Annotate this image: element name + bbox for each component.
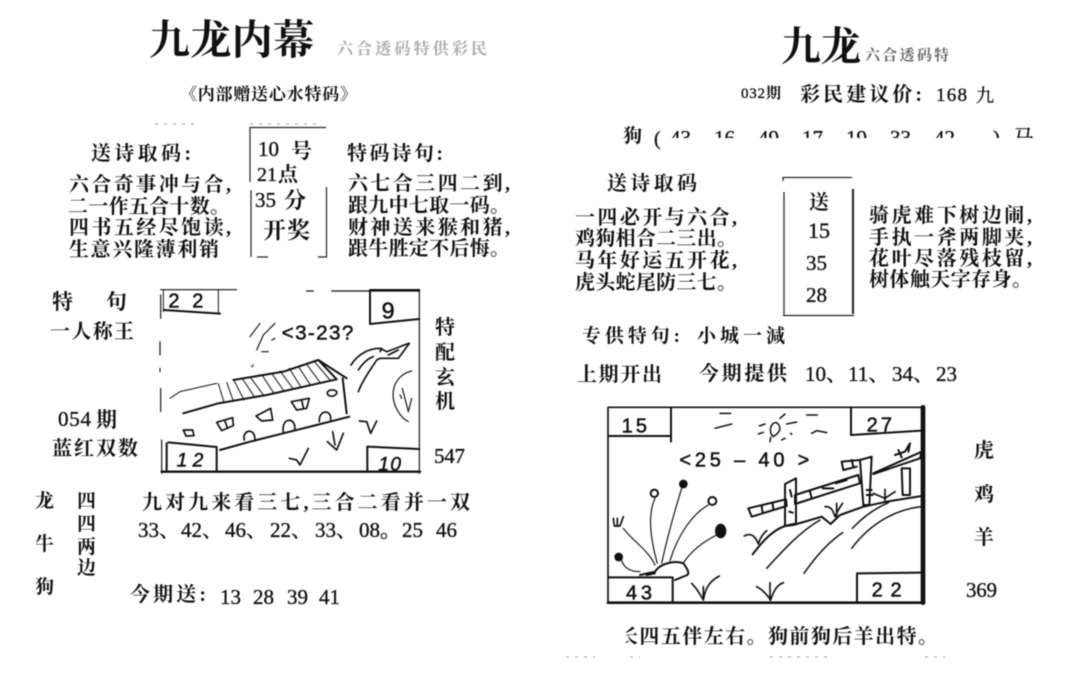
label: special phrase: 句: [106, 290, 127, 314]
drawing: right scene sketch: [608, 407, 924, 604]
text block: left poem: [68, 173, 231, 261]
box: 9: [370, 290, 419, 324]
icon: sun and clouds: [715, 413, 827, 442]
heading: internal special code: 《内部赠送心水特码》: [180, 84, 357, 104]
text: animal hints: 鸡: [974, 483, 994, 506]
box: 43: [609, 577, 673, 604]
row: clipped numbers: 43: [670, 126, 691, 150]
box: 10: 10: [378, 455, 401, 476]
row: clipped numbers: 16: [714, 126, 735, 150]
text: small city: 小城一減: [697, 325, 785, 347]
row: clipped numbers: 17: [802, 126, 823, 150]
box: 27: 27: [867, 415, 892, 437]
text: issue 032: 032: [741, 86, 765, 102]
subtitle: faded tagline: 六合透码特供彩民: [865, 46, 1001, 64]
panel: draw time box: 35: [255, 188, 276, 212]
building: windows and doors: [183, 390, 337, 440]
title: 九龙: 九龙: [781, 24, 861, 69]
text: issue 032: [741, 85, 781, 102]
label: special match mystery: 玄: [435, 366, 457, 389]
text: suggested price: 彩民建议价:: [800, 83, 922, 106]
text block: left poem: 一四必开与六合,: [575, 206, 737, 229]
box: 22: [163, 290, 220, 314]
text: price: [936, 85, 994, 106]
text block: left poem: 马年好运五开花,: [575, 248, 737, 272]
frame: [160, 290, 419, 473]
label: special phrase: [52, 290, 127, 314]
icon: scribble sun: [250, 323, 275, 367]
decorative scan residue below verse: [566, 656, 945, 658]
text: number range: <3-23?: [282, 321, 353, 344]
numbers: code row: 33、: [138, 518, 180, 542]
text: price: 九: [976, 86, 994, 106]
numbers: code row: 33、: [315, 518, 357, 542]
label: special phrase: 特: [52, 290, 73, 314]
box: 15: 15: [622, 416, 647, 438]
numbers: code row: 46: [436, 518, 457, 542]
numbers: provided numbers: 11、: [848, 362, 889, 386]
box: 9: 9: [382, 297, 395, 323]
text block: right poem: 骑虎难下树边闹,: [869, 204, 1032, 227]
row: clipped numbers: 49: [758, 126, 779, 150]
grass: [289, 421, 377, 465]
text block: right poem: [869, 204, 1032, 291]
shrub arcs: [393, 371, 412, 422]
row: clipped numbers: ): [993, 126, 1000, 150]
text: zodiac column: 狗: [35, 576, 54, 598]
frame: [608, 407, 923, 603]
text: price: 168: [936, 85, 967, 106]
text: four four two sides: 边: [77, 557, 96, 579]
box: 12: 12: [177, 451, 204, 472]
text: blue red even: 蓝红双数: [52, 437, 138, 460]
drawing: left scene sketch: [160, 290, 420, 476]
text block: left poem: 虎头蛇尾防三七。: [575, 271, 737, 294]
text: this issue gift: 今期送:: [130, 582, 206, 606]
text block: left poem: 鸡狗相合二三出。: [575, 227, 737, 250]
text block: left poem: 生意兴隆薄利销: [69, 237, 219, 261]
row: clipped numbers: [623, 125, 1034, 150]
text: exclusive phrase: 专供特句:: [582, 324, 680, 347]
text block: right poem: 跟九中七取一码。: [348, 194, 510, 217]
row: clipped numbers: 19: [846, 126, 867, 150]
text block: left poem: 二一作五合十数。: [68, 195, 230, 218]
hill lines: [753, 496, 922, 554]
box: 10: [367, 447, 419, 476]
numbers: gift numbers: [220, 585, 340, 609]
bird: [351, 343, 409, 392]
box: 15: [609, 408, 671, 442]
panel: gift numbers box: 15: [808, 218, 830, 243]
panel: gift numbers box: [783, 178, 854, 316]
numbers: code row: [138, 518, 457, 542]
panel: left sheet: [35, 17, 510, 609]
label: special match mystery: 特: [435, 316, 455, 339]
text: zodiac column: 龙: [35, 490, 54, 512]
numbers: gift numbers: 39: [287, 585, 308, 609]
numbers: code row: 25: [402, 518, 423, 542]
text: issue number: [58, 407, 117, 432]
title: 九龙内幕: 九龙内幕: [149, 17, 314, 63]
numbers: code row: 22、: [270, 518, 312, 542]
heading: special code verse: 特码诗句:: [347, 142, 443, 165]
row: clipped numbers: 33: [890, 126, 911, 150]
numbers: provided numbers: 23: [936, 362, 957, 386]
text: four four two sides: 四: [77, 490, 96, 512]
wall: crenellations: [748, 443, 922, 526]
text: issue 032: 期: [766, 85, 781, 102]
panel: draw time box: 号: [291, 139, 312, 163]
text: four four two sides: [77, 490, 96, 579]
row: clipped numbers: 42: [934, 126, 955, 150]
text block: left poem: 四书五经尽饱读,: [69, 216, 231, 239]
numbers: provided numbers: 10、: [805, 362, 847, 386]
box: 12: [167, 442, 217, 472]
row: clipped numbers: 马: [1013, 126, 1034, 150]
text block: right poem: 花叶尽落残枝留,: [869, 246, 1032, 270]
numbers: provided numbers: [805, 362, 957, 386]
numbers: gift numbers: 28: [253, 585, 274, 609]
panel: right sheet: [566, 24, 1034, 657]
numbers: code row: 42、: [181, 518, 223, 542]
text block: left poem: 六合奇事冲与合,: [69, 173, 231, 196]
numbers: code row: 08。: [359, 518, 401, 542]
text: one person king: 一人称王: [50, 320, 134, 343]
text: animal hints: [974, 439, 994, 549]
text block: left poem: [575, 206, 737, 294]
subtitle: faded tagline: 六合透码特供彩民: [337, 39, 487, 58]
text: four four two sides: 两: [77, 535, 96, 558]
text: issue number: 期: [96, 408, 117, 432]
text block: right poem: 手执一斧两脚夹,: [869, 226, 1032, 249]
text: animal hints: 羊: [974, 526, 994, 549]
text: bottom verse: 长四五伴左右。狗前狗后羊出特。: [618, 625, 938, 648]
flowers: [613, 480, 726, 580]
heading: poem for code: 送诗取码:: [91, 142, 191, 165]
box: 22: 22: [168, 291, 203, 313]
box: 27: [851, 408, 922, 437]
text: this issue: 今期提供: [699, 361, 789, 385]
panel: draw time box: 分: [284, 188, 306, 213]
text: number range: <25 – 40 >: [679, 450, 809, 472]
building: wall: [220, 378, 349, 450]
box: 43: 43: [626, 582, 652, 604]
heading: poem for code: 送诗取码: [607, 172, 697, 195]
text: issue number: 054: [58, 407, 92, 431]
panel: draw time box: 点: [278, 163, 300, 186]
grass: [692, 489, 895, 600]
text: animal hints: 虎: [974, 439, 994, 462]
row: clipped numbers: 狗: [623, 125, 642, 147]
text block: right poem: 六七合三四二到,: [348, 172, 510, 195]
row: clipped numbers: (: [654, 128, 661, 150]
panel: draw time box: 10: [258, 137, 279, 161]
text: zodiac column: [35, 490, 54, 598]
panel: gift numbers box: 送: [809, 191, 830, 214]
box: 22: 22: [872, 580, 902, 602]
number: 547: 547: [434, 444, 465, 468]
text: verse line: 九对九来看三七,三合二看并一双: [142, 491, 470, 514]
number: 369: 369: [966, 578, 997, 602]
numbers: code row: 46、: [225, 518, 267, 542]
text: four four two sides: 四: [77, 513, 96, 535]
numbers: gift numbers: 41: [319, 585, 340, 609]
label: special match mystery: 配: [435, 341, 455, 364]
numbers: gift numbers: 13: [220, 585, 241, 609]
panel: gift numbers box: 28: [806, 283, 827, 307]
text block: right poem: [348, 172, 510, 260]
decorative scan residue above box: [155, 123, 318, 125]
numbers: provided numbers: 34、: [892, 362, 934, 386]
text block: right poem: 财神送来猴和猪,: [348, 216, 510, 239]
text block: right poem: 树体触天字存身。: [869, 268, 1032, 291]
text block: right poem: 跟牛胜定不后悔。: [348, 236, 510, 260]
label: special match mystery: 机: [435, 390, 455, 413]
text: last issue: 上期开出: [577, 363, 662, 386]
label: special match mystery: [435, 316, 457, 413]
text: zodiac column: 牛: [35, 533, 54, 555]
box: 22: [857, 573, 922, 602]
panel: draw time box: 开奖: [263, 218, 310, 243]
building: roof: [183, 360, 347, 413]
panel: draw time box: 21: [257, 164, 277, 186]
panel: draw time box: [250, 127, 327, 257]
panel: gift numbers box: 35: [806, 251, 827, 275]
